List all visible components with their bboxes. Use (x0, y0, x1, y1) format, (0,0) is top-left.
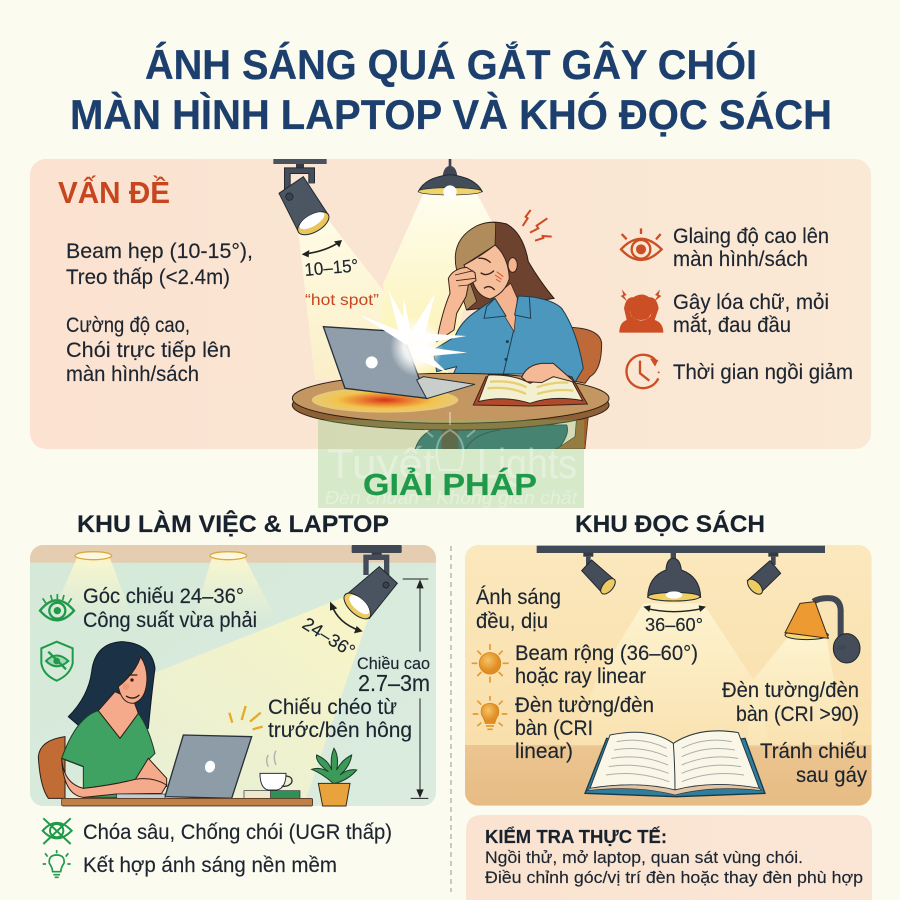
text: glare: Glaing độ cao lên (673, 225, 829, 248)
track spotlight (340, 545, 402, 623)
text: beam causes: Cường độ cao, (66, 314, 190, 337)
watermark: Tuyết (327, 440, 435, 487)
text: wall or desk lamp: bàn (CRI (515, 717, 593, 740)
text: sitting time: Thời gian ngồi giảm (673, 361, 853, 384)
heading: workspace: KHU LÀM VIỆC & LAPTOP (77, 510, 389, 538)
text: avoid back lighting: Tránh chiếu (760, 740, 867, 763)
panel: reality check: Ngồi thử, mở laptop, quan sát vùng chói. (485, 848, 803, 867)
raised hand and arm (437, 267, 476, 342)
icon: warm bulb (473, 696, 507, 729)
heading: reading area: KHU ĐỌC SÁCH (575, 510, 765, 538)
label: beam angle: 10–15° (304, 255, 359, 280)
angle arrow (330, 602, 363, 633)
wall lamp (785, 598, 860, 663)
chair (38, 737, 65, 798)
text: eye strain: Gây lóa chữ, mỏi (673, 291, 829, 314)
desk (62, 798, 313, 806)
text: wide beam: Beam rộng (36–60°) (515, 642, 698, 665)
icon: no glare (43, 818, 72, 844)
label: hot spot: “hot spot” (305, 292, 379, 309)
label: mounting height: Chiều cao (357, 654, 430, 673)
panel: reality check (466, 815, 872, 900)
text: low UGR: Chóa sâu, Chống chói (UGR thấp) (83, 821, 392, 844)
text: soft ambient light: Kết hợp ánh sáng nền mềm (83, 854, 337, 877)
hand on book (522, 363, 575, 383)
laptop (117, 735, 252, 798)
text: beam angle workspace: Góc chiếu 24–36° (83, 585, 244, 608)
panel: workspace illustration (30, 545, 436, 806)
label: mounting height (357, 654, 430, 696)
text: beam causes (66, 240, 253, 386)
text: CRI above 90: Đèn tường/đèn (722, 679, 859, 702)
text: beam causes: màn hình/sách (66, 363, 199, 386)
text: wide beam (515, 642, 698, 688)
icon: bulb (43, 850, 71, 877)
hair (455, 222, 554, 310)
strain marks (523, 210, 552, 241)
text: eye strain: mắt, đau đầu (673, 314, 791, 337)
downlights (75, 552, 247, 560)
title (70, 40, 832, 138)
panel: reality check: KIỂM TRA THỰC TẾ: (485, 826, 667, 847)
text: beam causes: Chói trực tiếp lên (66, 339, 231, 362)
text: wall or desk lamp: linear) (515, 740, 573, 763)
potted plant (312, 748, 357, 806)
text: CRI above 90: bàn (CRI >90) (736, 703, 859, 726)
panel: reading illustration (465, 545, 872, 806)
text: cross lighting: Chiếu chéo từ (268, 696, 397, 719)
text: even soft light: Ánh sáng (476, 586, 561, 609)
text: eye strain (673, 291, 829, 337)
trousers and table leg (415, 425, 567, 450)
illustration: woman with glare at table (273, 159, 609, 450)
watermark: Lights (477, 440, 577, 487)
icon: clock (626, 355, 660, 388)
angle arrow (304, 243, 337, 254)
pendant beam (382, 194, 492, 374)
shirt (433, 297, 583, 382)
heading: solution: GIẢI PHÁP (363, 467, 537, 502)
title: MÀN HÌNH LAPTOP VÀ KHÓ ĐỌC SÁCH (70, 90, 832, 138)
neck (493, 283, 517, 332)
label: wide beam angle: 36–60° (645, 615, 703, 635)
text: beam angle workspace: Công suất vừa phải (83, 609, 257, 632)
text: wall or desk lamp (515, 694, 654, 763)
heading: problem: VẤN ĐỀ (58, 175, 170, 210)
collar and buttons (484, 296, 531, 374)
icon: shield with crossed eye (41, 642, 73, 681)
coffee cup on books (244, 751, 300, 798)
icon: headache (619, 289, 663, 333)
text: beam angle workspace (83, 585, 257, 632)
woman (62, 642, 167, 797)
chair (552, 327, 602, 449)
icon: eye (621, 228, 662, 260)
text: beam causes: Treo thấp (<2.4m) (66, 266, 230, 289)
left spot (582, 553, 618, 597)
height dimension (403, 579, 428, 798)
highlight marks (229, 706, 263, 729)
label: angle: 24–36° (299, 613, 359, 661)
track rail (537, 546, 825, 553)
table (292, 373, 609, 430)
text: avoid back lighting (760, 740, 867, 787)
text: avoid back lighting: sau gáy (796, 764, 867, 787)
text: wide beam: hoặc ray linear (515, 665, 646, 688)
text: glare: màn hình/sách (673, 248, 808, 271)
watermark: Đèn chuẩn - Không gian chất (325, 488, 578, 508)
spotlight (273, 159, 333, 240)
panel: problem (30, 159, 871, 450)
text: glare (673, 225, 829, 271)
laptop (323, 327, 475, 399)
label: mounting height: 2.7–3m (358, 670, 430, 696)
right spot (745, 553, 781, 597)
text: beam causes: Beam hẹp (10-15°), (66, 240, 253, 263)
text: CRI above 90 (722, 679, 859, 726)
text: even soft light: đều, dịu (476, 610, 548, 633)
text: wall or desk lamp: Đèn tường/đèn (515, 694, 654, 717)
open book (585, 731, 765, 797)
panel: reality check: Điều chỉnh góc/vị trí đèn hoặc thay đèn phù hợp (485, 868, 863, 887)
icon: eye (40, 594, 74, 620)
title: ÁNH SÁNG QUÁ GẮT GÂY CHÓI (145, 40, 757, 88)
hot spot heat map (312, 387, 458, 413)
spot beam (298, 220, 383, 380)
pendant with beam angle (643, 553, 706, 612)
text: cross lighting: trước/bên hông (268, 719, 412, 742)
text: cross lighting (268, 696, 412, 742)
text: even soft light (476, 586, 561, 633)
pendant lamp (418, 159, 482, 199)
watermark (318, 412, 584, 508)
open book (473, 375, 587, 406)
icon: sun (472, 644, 509, 683)
face (464, 245, 517, 299)
glare burst (360, 290, 467, 377)
